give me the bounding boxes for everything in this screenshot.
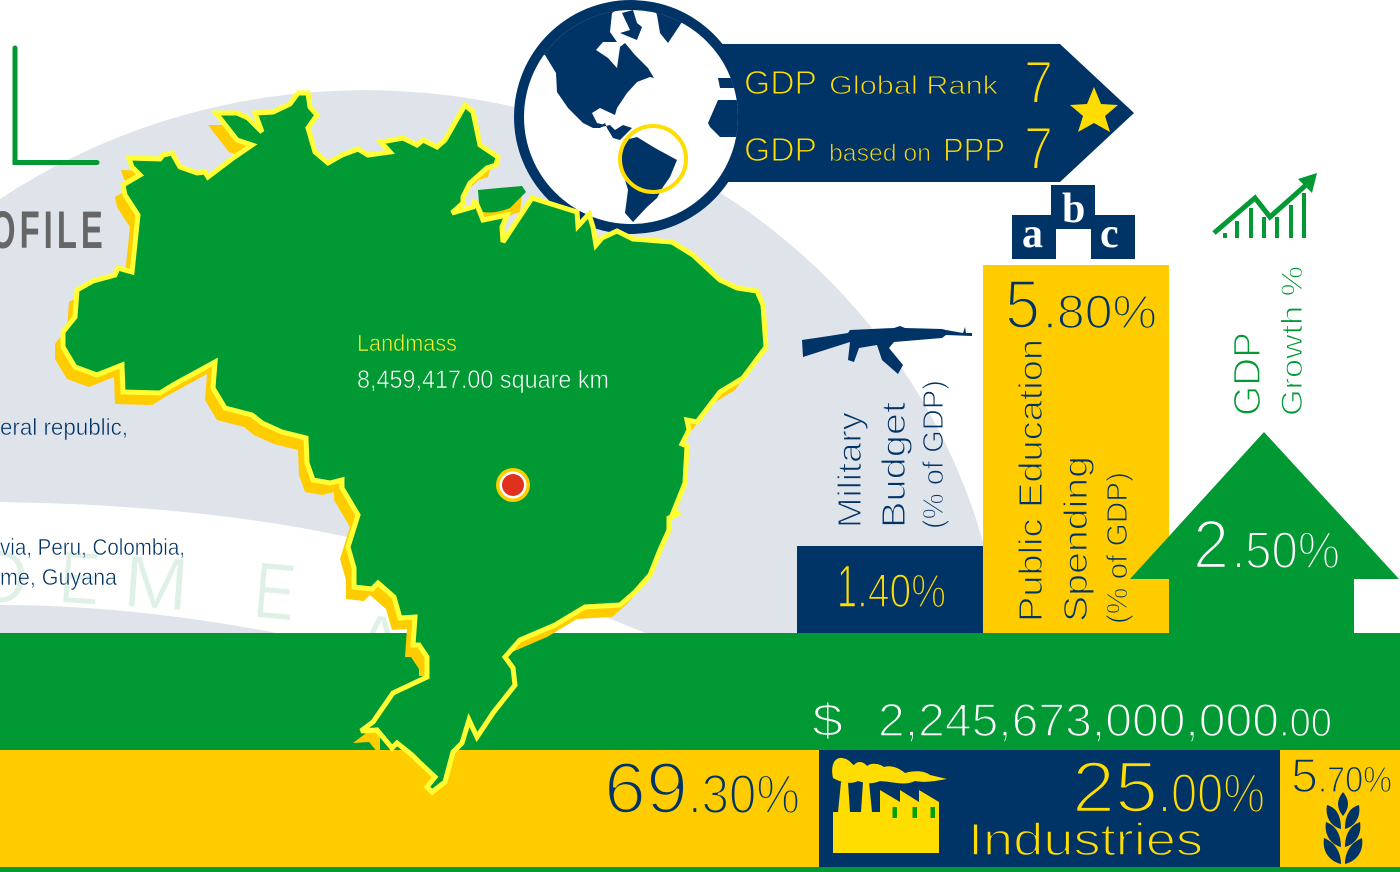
icon: rifle (802, 326, 972, 374)
banner labels: 7 (1024, 115, 1053, 182)
education value: 5 (1005, 266, 1040, 343)
watermark letters: M (121, 539, 192, 626)
services value (604, 749, 800, 829)
icon: factory (832, 758, 947, 853)
map: Marajo island (478, 186, 526, 212)
capital pin (496, 468, 530, 502)
agriculture value: .70% (1318, 759, 1392, 800)
icon: growth chart (1214, 173, 1317, 238)
military budget value: 1 (837, 553, 857, 620)
green L bracket (15, 48, 97, 162)
main green band (0, 633, 1400, 750)
icon: star (1070, 87, 1118, 132)
banner labels: GDP (744, 64, 817, 101)
landmass label: Landmass (357, 330, 457, 356)
banner labels (744, 49, 1053, 182)
military budget value (837, 553, 946, 620)
military budget label (831, 380, 950, 529)
education value: .80% (1043, 285, 1157, 338)
education bar (983, 265, 1169, 633)
growth value: .50% (1232, 522, 1340, 580)
bottom yellow band: agriculture (1280, 750, 1400, 867)
map: Brazil shadow (55, 125, 741, 750)
banner labels: Global Rank (829, 70, 999, 100)
industries label: Industries (968, 814, 1203, 865)
neighbours text: via, Peru, Colombia, (0, 534, 185, 560)
growth value: 2 (1193, 506, 1229, 583)
banner labels: 7 (1024, 49, 1053, 116)
neighbours text (0, 534, 185, 590)
education label: Public Education (1012, 339, 1049, 622)
bottom green strip (0, 867, 1400, 872)
bottom yellow band: services (0, 750, 819, 867)
GDP total value: 2,245,673,000,000 (878, 694, 1279, 746)
growth value (1193, 506, 1340, 583)
military budget value: .40% (857, 564, 946, 617)
neighbours text: me, Guyana (0, 564, 117, 590)
GDP growth label: Growth % (1276, 266, 1309, 416)
landmass value: 8,459,417.00 square km (357, 366, 609, 394)
icon: abc blocks: a (1022, 211, 1043, 257)
watermark letters (0, 533, 409, 685)
icon: wheat (1324, 792, 1362, 864)
rank banner arrow (720, 44, 1134, 182)
watermark letters: A (350, 597, 409, 685)
agriculture value (1291, 750, 1392, 803)
agriculture value: 5 (1291, 750, 1318, 803)
banner labels: PPP (943, 132, 1005, 168)
banner labels: based on (829, 140, 931, 167)
highlight ring (620, 126, 686, 192)
island shadow (476, 194, 522, 222)
services value: .30% (688, 763, 800, 825)
banner labels: GDP (744, 131, 817, 168)
education label: Spending (1057, 456, 1094, 622)
industries value: .00% (1158, 762, 1265, 824)
icon: abc blocks (1012, 185, 1135, 259)
government text: eral republic, (0, 414, 128, 440)
GDP growth label: GDP (1227, 332, 1269, 416)
military budget label: Budget (875, 402, 912, 528)
watermark letters: E (57, 535, 103, 621)
industries value (1072, 748, 1265, 828)
watermark letters: E (251, 545, 299, 638)
white swoosh band (0, 502, 645, 633)
military budget label: Military (831, 411, 868, 528)
globe icon (514, 0, 748, 234)
bottom navy band: industries (819, 750, 1280, 867)
grey arc background (0, 90, 1001, 633)
icon: abc blocks: c (1100, 211, 1119, 257)
education label (1012, 339, 1134, 624)
GDP total value: $ (812, 694, 843, 746)
services value: 69 (604, 749, 688, 829)
military budget label: (% of GDP) (918, 380, 950, 529)
education value (1005, 266, 1157, 343)
map: Brazil landmass (63, 93, 766, 792)
education label: (% of GDP) (1102, 472, 1134, 624)
military budget bar (797, 546, 983, 633)
industries value: 25 (1072, 748, 1158, 828)
icon: abc blocks: b (1062, 186, 1085, 232)
growth arrow (1130, 432, 1399, 633)
GDP growth label (1227, 266, 1309, 416)
GDP total value: .00 (1279, 701, 1332, 745)
